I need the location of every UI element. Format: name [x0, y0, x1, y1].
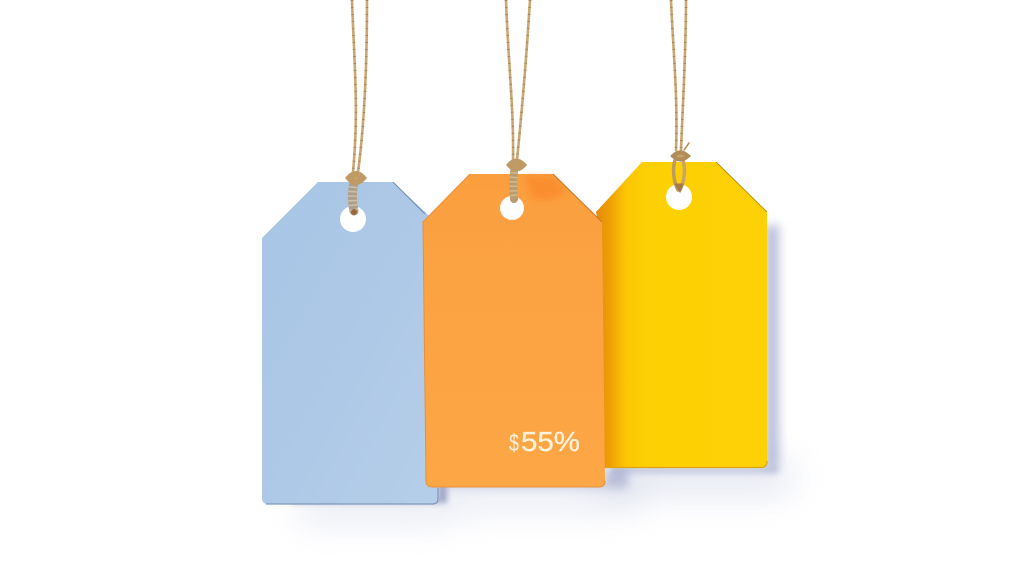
string: orange tag: [506, 0, 530, 199]
soft shadows behind tags: [292, 225, 790, 518]
tag: blue: [262, 0, 438, 504]
string: yellow tag: [671, 0, 689, 192]
price label: 55%: [521, 426, 580, 457]
tag: yellow: [596, 0, 767, 468]
tag: orange: [423, 0, 605, 487]
string: blue tag: [349, 0, 367, 215]
price label: $: [509, 430, 519, 457]
